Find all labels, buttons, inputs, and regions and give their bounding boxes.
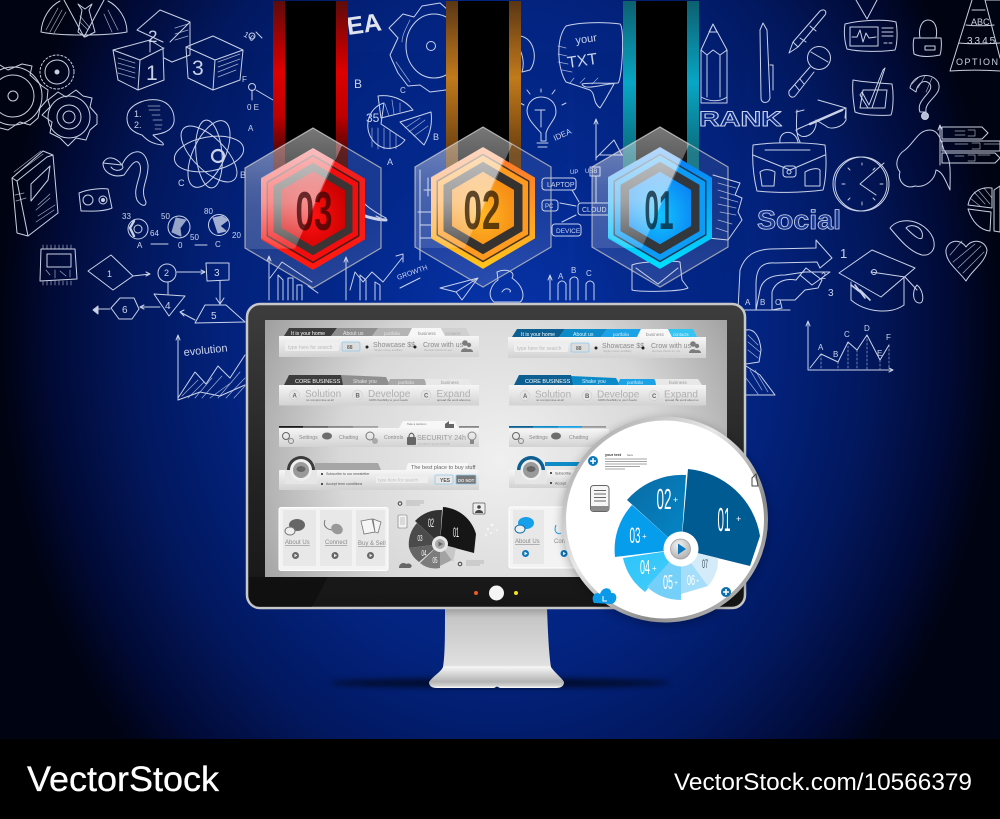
doodle: three small pies: 50 xyxy=(161,212,170,221)
blue services panel: Connect xyxy=(554,539,577,545)
doodle: your text speech bubble: your xyxy=(575,32,598,47)
doodle: line chart: A xyxy=(818,343,824,352)
blue nav bar 1: 88 xyxy=(576,346,582,352)
doodle: your text speech bubble xyxy=(558,23,623,108)
pie slice 04 xyxy=(623,549,681,592)
blue nav bar 1 xyxy=(508,329,706,358)
nav bar widget 1: Single money auxilliary xyxy=(374,348,403,352)
blue services panel: About Us xyxy=(515,539,540,545)
doodle: graduation cap xyxy=(839,250,923,311)
nav bar widget 4: Subscribe to our newsletter xyxy=(326,472,370,476)
doodle: flowchart: 1 xyxy=(107,269,112,279)
blue nav bar 2: B xyxy=(585,394,590,400)
nav bar widget 4: DO NOT xyxy=(458,478,475,483)
monitor stand xyxy=(429,608,564,688)
blue nav bar 2: Shake you xyxy=(582,379,606,385)
blue nav bar 1: contacts xyxy=(673,332,689,337)
doodle: numbered cubes: 3 xyxy=(192,57,204,80)
nav bar widget 4: YES xyxy=(440,478,451,484)
doodle: three small pies: 20 xyxy=(232,231,241,240)
blue nav bar 2: CORE BUSINESS xyxy=(525,379,571,385)
badge 02 xyxy=(413,125,551,287)
blue services panel xyxy=(509,507,579,568)
doodle: device diagram: UP xyxy=(570,170,578,176)
doodle: flowchart: 6 xyxy=(122,305,128,316)
doodles: right cluster xyxy=(699,0,1000,395)
footer image id: VectorStock.com/10566379 xyxy=(674,769,972,796)
doodle: paper stack and box xyxy=(632,175,742,291)
services panel: Buy & Sell xyxy=(358,541,386,547)
doodle: IDEA lettering: EA xyxy=(345,8,383,41)
blue nav bar 3: Chatting xyxy=(569,435,588,441)
doodle: go icon xyxy=(79,189,112,211)
blue nav bar 3 xyxy=(509,426,609,447)
nav bar widget 1: Crow with us xyxy=(423,342,464,349)
grey pie chart: 02 xyxy=(428,516,434,530)
blue nav bar 1: the best choice for you xyxy=(652,349,681,353)
pie labels: + xyxy=(674,580,678,587)
nav bar widget 1: the best choice for you xyxy=(424,348,453,352)
magnifier: text block xyxy=(605,453,647,469)
blue nav bar 1: Showcase $$ xyxy=(602,343,644,350)
doodle: pie chart 35: A xyxy=(387,157,393,167)
doodle: flowchart: 5 xyxy=(211,311,217,322)
monitor frame xyxy=(247,304,745,608)
camera and power dots xyxy=(474,586,518,600)
doodle: flowchart xyxy=(88,255,245,323)
nav bar widget 4: type here for search xyxy=(378,478,419,482)
doodle: three small pies: A xyxy=(137,241,143,250)
doodle: three small pies: C xyxy=(215,240,221,249)
doodle: device diagram: DEVICE xyxy=(556,228,581,235)
pie slice 07 xyxy=(681,549,718,586)
magnifier: text block: your text xyxy=(605,453,622,457)
nav bar widget 2: 100% flexibility to your needs xyxy=(369,398,408,402)
doodle: heart xyxy=(946,241,987,281)
pie labels xyxy=(630,484,741,594)
pie labels: 02 xyxy=(656,484,672,516)
magnifier: lower plus button xyxy=(721,587,731,597)
pie labels: + xyxy=(736,514,741,524)
pie hub with play button xyxy=(664,532,698,566)
doodle: clock xyxy=(833,157,889,211)
nav bar widget 4 xyxy=(279,456,479,490)
doodle: atom xyxy=(172,115,246,193)
grey pie chart: 01 xyxy=(453,524,459,540)
doodle: line chart: F xyxy=(886,333,891,342)
doodle: three small pies: 50 xyxy=(190,233,199,242)
doodle: ABC arrows: B xyxy=(760,298,765,307)
nav bar widget 3: Take a decision xyxy=(407,422,427,426)
doodle: line chart: D xyxy=(864,324,870,333)
doodle: ABC arrows: 1 xyxy=(840,246,847,261)
badge number: 03 xyxy=(296,180,332,242)
pie slice 05 xyxy=(647,549,681,600)
doodle: evolution chart xyxy=(176,335,245,400)
nav bar widget 2: A xyxy=(292,394,298,400)
doodle: light bulb xyxy=(520,89,573,147)
nav bar widget 1: contacts xyxy=(445,331,461,336)
nav bar widget 2 xyxy=(279,375,479,406)
nav bar widget 2: Solution xyxy=(305,389,341,400)
nav bar widget 2: B xyxy=(356,394,360,400)
doodle: flowchart: 4 xyxy=(165,301,171,312)
nav bar widget 1: Showcase $$ xyxy=(373,342,415,349)
pie labels: 04 xyxy=(640,557,650,579)
ribbon: orange strap xyxy=(446,1,521,171)
doodle: keyword labels xyxy=(242,30,273,133)
blue nav bar 2 xyxy=(509,375,706,406)
nav bar widget 2: Shake you xyxy=(353,379,377,385)
nav bar widget 2: CORE BUSINESS xyxy=(295,379,341,385)
pie slice 01 xyxy=(681,469,760,566)
blue nav bar 2: Develope xyxy=(597,390,640,400)
ribbon: red strap xyxy=(273,1,348,171)
nav bar widget 4: The best place to buy stuff xyxy=(411,465,476,471)
doodle: keyword labels: 0 E xyxy=(247,103,259,112)
nav bar widget 3: protect your home xyxy=(418,441,451,446)
doodle: keyword labels: 1 0 xyxy=(242,30,257,44)
doodle: list speech bubble: 2. xyxy=(134,120,142,130)
doodle: numbered cubes xyxy=(113,10,243,90)
services panel xyxy=(279,508,388,570)
badge number: 02 xyxy=(464,179,500,241)
screen widgets: blue column xyxy=(508,329,706,568)
blue nav bar 2: business xyxy=(669,380,688,385)
magnifier xyxy=(562,418,768,625)
nav bar widget 3: SECURITY 24h xyxy=(417,435,466,442)
doodle: gears xyxy=(0,55,97,146)
pie labels: 05 xyxy=(663,572,673,594)
pie labels: + xyxy=(652,564,657,573)
doodle: pie chart 35: 35 xyxy=(366,111,380,125)
doodle: flowchart: 3 xyxy=(214,268,220,279)
doodle: checkbox xyxy=(853,68,893,115)
doodle: numbered cubes: 2 xyxy=(148,27,157,46)
pie labels: + xyxy=(642,532,647,541)
doodle: ABC arrows xyxy=(738,240,847,310)
services panel: About Us xyxy=(285,540,310,546)
nav bar widget 2: no compromise at all xyxy=(306,398,334,402)
magnifier: cloud icon xyxy=(593,588,616,604)
doodle: light bulb: IDEA xyxy=(552,126,573,143)
doodle: atom: B xyxy=(240,170,246,180)
nav bar widget 1 xyxy=(279,328,479,357)
footer logo: VectorStock xyxy=(27,759,219,799)
pie labels: 07 xyxy=(702,557,708,571)
magnifier: plus button xyxy=(588,456,598,466)
pie labels: 01 xyxy=(718,501,730,538)
blue nav bar 1: type here for search xyxy=(517,346,562,352)
doodle: growth and finance charts: C xyxy=(586,269,592,278)
doodle: book xyxy=(12,151,58,236)
doodle: ABC arrows: C xyxy=(775,298,781,307)
nav bar widget 1: 88 xyxy=(347,345,353,351)
blue nav bar 4 xyxy=(509,456,589,488)
nav bar widget 1: type here for search xyxy=(288,345,333,351)
doodle: device diagram xyxy=(542,119,640,236)
doodle: pyramid: 3345 xyxy=(967,36,997,47)
doodle: large gear xyxy=(389,3,534,92)
doodle: computer mouse xyxy=(890,221,934,255)
blue nav bar 2: Solution xyxy=(535,390,571,400)
nav bar widget 4: Accept term conditions xyxy=(326,482,363,486)
doodle: atom: C xyxy=(178,178,185,188)
pie labels: 03 xyxy=(630,523,640,548)
nav bar widget 2: Develope xyxy=(368,389,411,400)
doodle: three small pies: 64 xyxy=(150,229,159,238)
doodle: keyword labels: F xyxy=(242,75,247,84)
magnifier: user icon xyxy=(752,474,758,486)
blue nav bar 2: C xyxy=(652,394,657,400)
doodle: pyramid xyxy=(950,0,1000,71)
nav bar widget 2: C xyxy=(424,394,429,400)
doodle: curly question mark xyxy=(103,152,148,205)
pie labels: 06 xyxy=(687,572,695,589)
doodle: evolution chart: evolution xyxy=(183,342,228,359)
doodle: suit and tie xyxy=(41,0,127,37)
ribbon: blue strap xyxy=(623,1,699,171)
pie slice 03 xyxy=(615,505,681,557)
nav bar widget 1: business xyxy=(418,331,437,336)
badge 01 xyxy=(590,125,728,287)
doodle: your text speech bubble: TXT xyxy=(566,51,599,72)
doodle: padlock xyxy=(913,20,941,56)
doodle: tv monitor xyxy=(844,0,897,51)
doodle: question mark xyxy=(910,75,939,120)
blue nav bar 1: portfolio xyxy=(613,332,630,337)
nav bar widget 1: It is your home xyxy=(291,331,325,337)
magnifier: tablet icon xyxy=(590,486,609,512)
blue nav bar 4: Accept xyxy=(555,482,566,486)
doodle: ABC arrows: 3 xyxy=(828,288,834,299)
nav bar widget 3 xyxy=(279,421,479,447)
blue nav bar 2: portfolio xyxy=(627,380,644,385)
doodle: pencil and pen xyxy=(701,23,773,103)
doodle: pie chart 35 xyxy=(354,77,439,167)
doodle: pie chart 35: B xyxy=(354,77,362,91)
doodle: device diagram: PC xyxy=(545,204,554,210)
monitor screen xyxy=(265,320,727,577)
blue nav bar 3: Settings xyxy=(529,435,548,441)
doodle: three small pies xyxy=(122,207,241,250)
doodle: pie chart 35: C xyxy=(400,86,406,95)
doodle: growth and finance charts: GROWTH xyxy=(396,264,429,282)
blue nav bar 1: Single money auxilliary xyxy=(603,349,632,353)
doodle: person sketch xyxy=(746,330,775,395)
nav bar widget 3: Chatting xyxy=(339,435,358,441)
doodle: pyramid: ABC xyxy=(971,17,990,27)
blue nav bar 2: no compromise at all xyxy=(536,398,564,402)
nav bar widget 1: About us xyxy=(343,331,364,337)
pie slice 02 xyxy=(627,475,686,549)
nav bar widget 3: Settings xyxy=(299,435,318,441)
blue nav bar 2: Expand xyxy=(664,390,698,400)
doodle: RANK lettering: RANK xyxy=(699,108,782,131)
doodles: centre cluster xyxy=(242,3,742,302)
grey pie chart xyxy=(398,501,498,568)
doodle: growth and finance charts: B xyxy=(571,266,576,275)
doodle: three small pies: 33 xyxy=(122,212,131,221)
screen widgets: grey column xyxy=(279,328,498,570)
doodle: line chart: E xyxy=(877,349,882,358)
doodles: left cluster xyxy=(0,0,246,400)
pie slice 06 xyxy=(681,549,708,594)
grey pie chart: 03 xyxy=(418,534,423,543)
blue nav bar 2: 100% flexibility to your needs xyxy=(598,398,637,402)
blue nav bar 1: It is your home xyxy=(521,332,555,338)
doodle: pie chart 35: B xyxy=(433,132,439,142)
grey pie chart: 04 xyxy=(422,549,427,558)
doodle: three small pies: 80 xyxy=(204,207,213,216)
doodle: right pie xyxy=(968,186,1000,232)
doodle: ABC arrows: A xyxy=(745,298,751,307)
nav bar widget 2: business xyxy=(441,380,460,385)
blue nav bar 2: spread the work about us xyxy=(665,398,699,402)
doodle: list speech bubble xyxy=(127,100,174,145)
pie labels: + xyxy=(673,495,678,505)
doodle: flowchart: 2 xyxy=(164,268,169,278)
nav bar widget 2: spread the work about us xyxy=(437,398,471,402)
monitor ground shadow xyxy=(330,678,670,688)
doodle: keyword labels: A xyxy=(248,124,254,133)
nav bar widget 2: Expand xyxy=(436,389,470,400)
doodle: numbered cubes: 1 xyxy=(146,62,158,85)
blue nav bar 4: Subscribe xyxy=(555,472,571,476)
grey pie chart: 05 xyxy=(432,556,438,565)
badge 01: 01 xyxy=(644,179,674,241)
doodle: device diagram: LAPTOP xyxy=(547,182,575,189)
doodle: list speech bubble: 1. xyxy=(134,109,142,119)
doodle: Social lettering: Social xyxy=(757,205,841,235)
doodle: diagonal pencil xyxy=(789,10,826,53)
nav bar widget 3: Controls xyxy=(384,435,404,441)
doodle: device diagram: CLOUD xyxy=(582,207,607,214)
badge 03 xyxy=(243,126,381,288)
doodle: growth and finance charts xyxy=(267,170,594,302)
nav bar widget 2: portfolio xyxy=(398,380,415,385)
doodle: cloud and tags xyxy=(897,125,1000,190)
doodle: magnifier xyxy=(789,46,830,97)
footer band xyxy=(0,739,1000,819)
doodle: three small pies: 0 xyxy=(178,241,183,250)
doodle: line chart: C xyxy=(844,330,850,339)
pie labels: + xyxy=(696,579,700,585)
blue nav bar 1: business xyxy=(646,332,665,337)
doodle: line chart: B xyxy=(833,350,838,359)
doodle: growth and finance charts: A xyxy=(558,272,564,281)
doodle: circuit chip xyxy=(40,245,77,285)
doodle: briefcase xyxy=(753,132,826,192)
doodle: line chart xyxy=(806,321,893,372)
doodle: device diagram: USB xyxy=(585,169,597,175)
blue nav bar 1: Crow with us xyxy=(651,343,692,350)
doodle: ABC arrows: 2 xyxy=(821,271,826,281)
doodle: glasses xyxy=(796,100,846,142)
magnifier: text block: here xyxy=(627,453,633,457)
services panel: Connect xyxy=(325,540,348,546)
nav bar widget 1: portfolio xyxy=(384,331,401,336)
blue nav bar 1: About us xyxy=(573,332,594,338)
blue nav bar 2: A xyxy=(523,394,528,400)
